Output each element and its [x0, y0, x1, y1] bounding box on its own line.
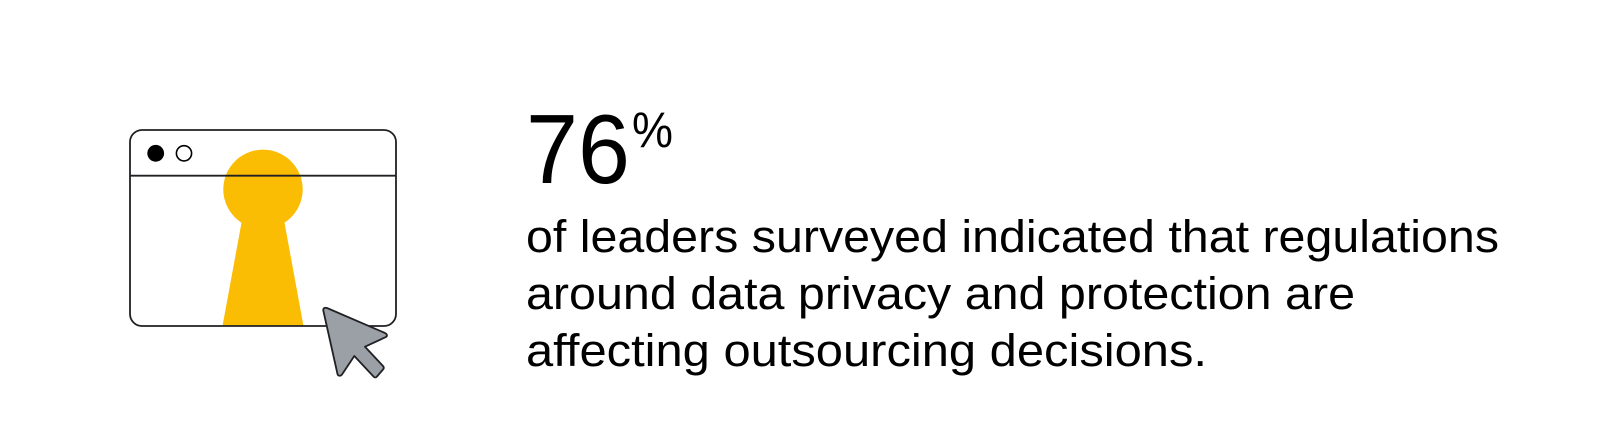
- keyhole: [222, 150, 304, 326]
- percent sign: %: [632, 102, 673, 158]
- browser window frame: [130, 130, 396, 326]
- window button filled: [147, 145, 164, 162]
- line 1: of leaders surveyed indicated that regulations: [526, 211, 1499, 262]
- icon: browser window with keyhole and cursor: [130, 130, 396, 377]
- browser title bar line: [130, 175, 396, 177]
- line 2: around data privacy and protection are: [526, 268, 1355, 319]
- statistic: 76 percent: [526, 94, 673, 204]
- line 3: affecting outsourcing decisions.: [526, 325, 1207, 376]
- window button outline: [176, 146, 192, 161]
- number 76: 76: [526, 94, 630, 204]
- cursor arrow: [323, 308, 387, 377]
- description text: [526, 211, 1499, 376]
